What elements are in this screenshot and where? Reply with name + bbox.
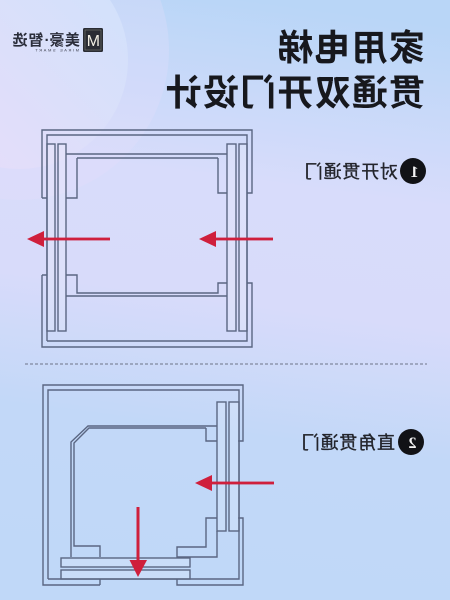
side door panels — [217, 402, 226, 531]
car outline — [66, 154, 227, 296]
logo — [12, 28, 103, 52]
title: 贯通双开门设计 — [165, 72, 425, 113]
diagram 1: opposite doors — [27, 130, 273, 347]
right door panels — [227, 144, 236, 331]
shaft walls — [42, 130, 252, 347]
label 1 — [304, 158, 426, 184]
badge 1: 1 — [410, 164, 418, 181]
label text 2: 直角贯通门 — [301, 433, 395, 453]
label 2 — [301, 429, 424, 455]
arrow left — [27, 231, 110, 247]
label text 1: 对开贯通门 — [304, 162, 398, 182]
decorative circles — [0, 0, 169, 200]
arrow right — [199, 231, 273, 247]
logo text: MIRAE SMART — [34, 48, 79, 52]
shaft walls — [43, 385, 243, 585]
car outline — [71, 426, 217, 557]
logo text: 美豪·智选 — [12, 31, 80, 49]
divider — [25, 363, 427, 365]
arrow down — [130, 507, 147, 577]
arrow horizontal — [195, 475, 274, 491]
logo badge: M — [87, 33, 100, 50]
left door panels — [47, 144, 55, 331]
diagram 2: right-angle doors — [43, 385, 274, 585]
title — [165, 27, 425, 113]
bottom door panels — [61, 558, 190, 567]
badge 2: 2 — [408, 435, 416, 452]
title: 家用电梯 — [276, 27, 425, 68]
